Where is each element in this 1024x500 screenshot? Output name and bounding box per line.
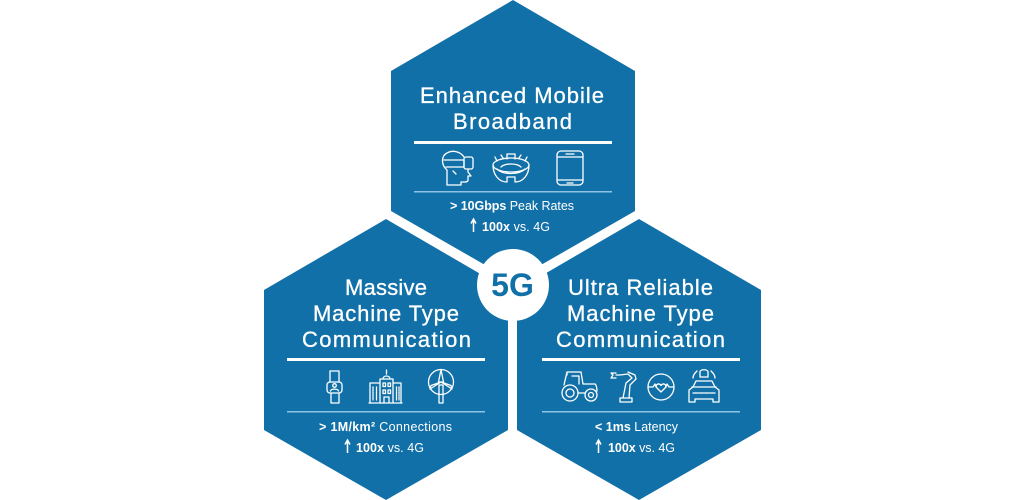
center badge: 5G bbox=[477, 249, 549, 321]
heading: ultra reliable machine type communication: Machine Type bbox=[567, 301, 714, 326]
icon: smartwatch bbox=[327, 371, 342, 403]
stat: 100x vs 4G: 100x vs. 4G bbox=[608, 441, 675, 455]
panel: massive machine type communication bbox=[264, 219, 508, 500]
heading: enhanced mobile broadband: Broadband bbox=[453, 109, 572, 134]
center badge: 5G: 5G bbox=[491, 267, 534, 303]
panel: ultra reliable machine type communication bbox=[517, 219, 761, 500]
icon: stadium bbox=[493, 154, 529, 182]
icon: wind turbine bbox=[428, 370, 454, 403]
icon: VR headset bbox=[442, 151, 473, 185]
heading: enhanced mobile broadband bbox=[420, 83, 604, 134]
icon: city buildings bbox=[369, 370, 402, 403]
icon: tablet bbox=[557, 151, 583, 185]
heading: massive machine type communication bbox=[302, 275, 471, 352]
heading: ultra reliable machine type communication: Communication bbox=[556, 327, 725, 352]
heading: massive machine type communication: Massive bbox=[345, 275, 427, 300]
icon: tractor bbox=[562, 372, 597, 401]
panel: enhanced mobile broadband bbox=[391, 0, 635, 281]
icon: connected car bbox=[689, 370, 719, 402]
heading: massive machine type communication: Machine Type bbox=[313, 301, 459, 326]
stat: 100x vs 4G: 100x vs. 4G bbox=[482, 220, 550, 234]
stat: 100x vs 4G: 100x vs. 4G bbox=[356, 441, 424, 455]
heading: massive machine type communication: Communication bbox=[302, 327, 471, 352]
heading: enhanced mobile broadband: Enhanced Mobile bbox=[420, 83, 604, 108]
heading: ultra reliable machine type communication bbox=[556, 275, 725, 352]
heading: ultra reliable machine type communication: Ultra Reliable bbox=[568, 275, 713, 300]
stat: connections: > 1M/km² Connections bbox=[319, 420, 452, 434]
icon: up arrow bbox=[596, 440, 601, 453]
stat: peak rates: > 10Gbps Peak Rates bbox=[450, 199, 574, 213]
icon: heart monitor bbox=[648, 374, 674, 400]
icon: up arrow bbox=[345, 440, 350, 453]
icon: up arrow bbox=[471, 219, 476, 232]
stat: latency: < 1ms Latency bbox=[595, 420, 679, 434]
icon: robot arm bbox=[611, 372, 636, 402]
